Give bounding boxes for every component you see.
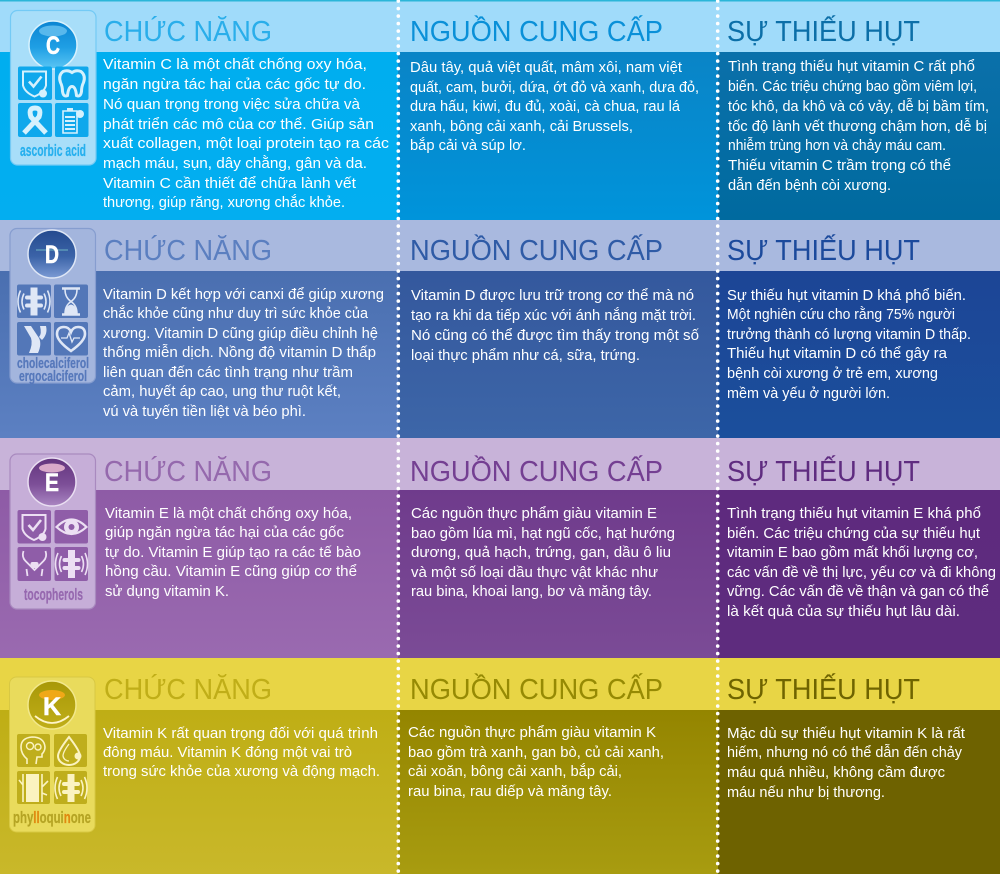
- text block: vitamin K sources: cải xoăn, bông cải xanh, bắp cải,: [408, 763, 622, 780]
- heading: sources: NGUỒN CUNG CẤP: [410, 14, 663, 48]
- text block: vitamin E function: hồng cầu. Vitamin E cũng giúp cơ thể: [105, 563, 357, 580]
- text block: vitamin D deficiency: bệnh còi xương ở trẻ em, xương: [727, 365, 938, 382]
- badge: vitamin K: [10, 677, 95, 832]
- text block: vitamin C function: mạch máu, sụn, dây chằng, gân và da.: [103, 155, 367, 172]
- text block: vitamin D sources: tạo ra khi da tiếp xúc với ánh nắng mặt trời.: [411, 307, 696, 324]
- icon: battery: [55, 103, 88, 137]
- text block: vitamin D deficiency: Thiếu hụt vitamin D có thể gây ra: [727, 345, 948, 362]
- text block: vitamin E deficiency: là kết quả của sự thiếu hụt lâu dài.: [727, 603, 960, 620]
- text block: vitamin K deficiency: [727, 725, 966, 801]
- label: phylloquinone: phylloquinone: [13, 809, 91, 827]
- text block: vitamin D sources: Nó cũng có thể được tìm thấy trong một số: [411, 327, 700, 344]
- badge: vitamin E: [10, 454, 96, 609]
- text block: vitamin E deficiency: Tình trạng thiếu hụt vitamin E khá phổ: [727, 505, 981, 522]
- text block: vitamin E function: Vitamin E là một chất chống oxy hóa,: [105, 505, 352, 522]
- text block: vitamin E sources: [411, 505, 675, 600]
- label: ascorbic acid: ascorbic acid: [20, 142, 86, 160]
- text block: vitamin C sources: bắp cải và súp lơ.: [410, 137, 526, 154]
- icon: K sphere: [28, 681, 76, 729]
- text block: vitamin K sources: rau bina, rau diếp và măng tây.: [408, 783, 612, 800]
- text block: vitamin E deficiency: vững. Các vấn đề về thận và gan có thể: [727, 583, 989, 600]
- heading: sources: NGUỒN CUNG CẤP: [410, 672, 663, 706]
- text block: vitamin D function: xương. Vitamin D cũng giúp điều chỉnh hệ: [103, 325, 378, 342]
- text block: vitamin C deficiency: nhiễm trùng hơn và chảy máu cam.: [728, 137, 946, 154]
- text block: vitamin D sources: loại thực phẩm như cá, sữa, trứng.: [411, 347, 640, 364]
- icon: joint: [54, 547, 88, 581]
- icon: hourglass: [54, 284, 88, 318]
- icon: C sphere: [29, 21, 77, 69]
- text block: vitamin D function: vú và tuyến tiền liệt và béo phì.: [103, 403, 306, 420]
- text block: vitamin C deficiency: biến. Các triệu chứng bao gồm viêm lợi,: [728, 78, 977, 95]
- panel: vitamin D row: [0, 220, 1000, 438]
- text block: vitamin D deficiency: trưởng thành có lượng vitamin D thấp.: [727, 326, 971, 343]
- text block: vitamin K function: đông máu. Vitamin K đóng một vai trò: [103, 744, 352, 761]
- text block: vitamin C sources: quất, cam, bưởi, dứa, ớt đỏ và xanh, dưa đỏ,: [410, 79, 699, 96]
- badge: vitamin D: [10, 228, 96, 385]
- dotted column divider left: [396, 1, 400, 874]
- icon: C sphere: C: [46, 32, 60, 60]
- text block: vitamin E sources: dương, quả hạch, trứng, gan, dầu ô liu: [411, 544, 671, 561]
- text block: vitamin K deficiency: Mặc dù sự thiếu hụt vitamin K là rất: [727, 725, 966, 742]
- text block: vitamin E deficiency: [727, 505, 996, 620]
- label: cholecalciferol ergocalciferol: [17, 355, 89, 385]
- heading: sources: NGUỒN CUNG CẤP: [410, 454, 663, 488]
- text block: vitamin K deficiency: máu nếu như bị thương.: [727, 784, 885, 801]
- text block: vitamin C deficiency: tóc khô, da khô và có vảy, dễ bị bầm tím,: [728, 98, 989, 115]
- text block: vitamin D function: Vitamin D kết hợp với canxi để giúp xương: [103, 286, 384, 303]
- text block: vitamin C sources: xanh, bông cải xanh, cải Brussels,: [410, 118, 633, 135]
- icon: brain: [17, 734, 50, 767]
- panel: vitamin K row: [0, 658, 1000, 874]
- text block: vitamin C function: xuất collagen, một loại protein tạo ra các: [103, 135, 390, 152]
- text block: vitamin K sources: Các nguồn thực phẩm giàu vitamin K: [408, 724, 656, 741]
- icon: shield: [18, 66, 52, 100]
- text block: vitamin C deficiency: [728, 58, 989, 194]
- text block: vitamin K deficiency: máu quá nhiều, không cầm được: [727, 764, 945, 781]
- icon: throat: [18, 547, 51, 581]
- icon: knee: [17, 322, 51, 356]
- icon: vessel: [17, 771, 50, 804]
- text block: vitamin E sources: và một số loại dầu thực vật khác như: [411, 564, 658, 581]
- text block: vitamin D deficiency: mềm và yếu ở người lớn.: [727, 385, 890, 402]
- text block: vitamin D deficiency: Một nghiên cứu cho rằng 75% người: [727, 306, 955, 323]
- text block: vitamin E sources: rau bina, khoai lang, bơ và măng tây.: [411, 583, 652, 600]
- heading: function: CHỨC NĂNG: [104, 455, 272, 488]
- text block: vitamin C function: ngăn ngừa tác hại của các gốc tự do.: [103, 76, 366, 93]
- heading: function: CHỨC NĂNG: [104, 234, 272, 267]
- icon: K sphere: K: [43, 693, 61, 721]
- icon: D sphere: [28, 230, 76, 278]
- heading: function: CHỨC NĂNG: [104, 673, 272, 706]
- heading: deficiency: SỰ THIẾU HỤT: [727, 233, 920, 267]
- text block: vitamin D sources: [411, 287, 700, 364]
- text block: vitamin K sources: [408, 724, 664, 800]
- text block: vitamin D function: [103, 286, 384, 420]
- text block: vitamin C sources: [410, 59, 699, 154]
- text block: vitamin E function: tự do. Vitamin E giúp tạo ra các tế bào: [105, 544, 361, 561]
- label: cholecalciferol ergocalciferol: cholecalciferol: [17, 355, 89, 372]
- icon: eye: [54, 510, 88, 544]
- icon: E sphere: [28, 458, 76, 506]
- text block: vitamin E function: giúp ngăn ngừa tác hại của các gốc: [105, 524, 344, 541]
- dotted column divider right: [716, 1, 720, 874]
- text block: vitamin E sources: bao gồm lúa mì, hạt ngũ cốc, hạt hướng: [411, 525, 675, 542]
- icon: shield: [18, 510, 51, 544]
- panel: vitamin E row: [0, 438, 1000, 658]
- text block: vitamin C function: Vitamin C cần thiết để chữa lành vết: [103, 175, 357, 192]
- text block: vitamin K sources: bao gồm trà xanh, gan bò, củ cải xanh,: [408, 744, 664, 761]
- heading: deficiency: SỰ THIẾU HỤT: [727, 672, 920, 706]
- text block: vitamin D function: thống miễn dịch. Nồng độ vitamin D thấp: [103, 344, 376, 361]
- text block: vitamin E function: [105, 505, 361, 600]
- text block: vitamin E deficiency: biến. Các triệu chứng của sự thiếu hụt: [727, 525, 981, 542]
- heading: sources: NGUỒN CUNG CẤP: [410, 233, 663, 267]
- icon: E sphere: E: [45, 469, 59, 497]
- text block: vitamin K function: trong sức khỏe của xương và động mạch.: [103, 763, 380, 780]
- heading: function: CHỨC NĂNG: [104, 15, 272, 48]
- heading: deficiency: SỰ THIẾU HỤT: [727, 14, 920, 48]
- icon: joint: [54, 771, 87, 804]
- text block: vitamin D function: cảm, huyết áp cao, ung thư ruột kết,: [103, 383, 341, 400]
- text block: vitamin C function: [103, 56, 390, 211]
- text block: vitamin D deficiency: [727, 287, 971, 402]
- badge: vitamin C: [10, 10, 96, 165]
- text block: vitamin K deficiency: hiếm, nhưng nó có thể dẫn đến chảy: [727, 744, 962, 761]
- text block: vitamin C deficiency: tốc độ lành vết thương chậm hơn, dễ bị: [728, 118, 987, 135]
- text block: vitamin C sources: Dâu tây, quả việt quất, mâm xôi, nam việt: [410, 59, 683, 76]
- text block: vitamin K function: [103, 725, 380, 780]
- text block: vitamin D function: chắc khỏe cũng như duy trì sức khỏe của: [103, 305, 369, 322]
- icon: drop: [54, 734, 87, 767]
- text block: vitamin D function: liên quan đến các tình trạng như trầm: [103, 364, 353, 381]
- text block: vitamin C deficiency: Thiếu vitamin C trầm trọng có thể: [728, 157, 951, 174]
- text block: vitamin C function: phát triển các mô của cơ thể. Giúp sản: [103, 116, 374, 133]
- text block: vitamin D sources: Vitamin D được lưu trữ trong cơ thể mà nó: [411, 287, 694, 304]
- icon: tooth: [55, 66, 88, 100]
- label: tocopherols: tocopherols: [24, 586, 83, 604]
- text block: vitamin C function: Vitamin C là một chất chống oxy hóa,: [103, 56, 367, 73]
- text block: vitamin C function: thương, giúp răng, xương chắc khỏe.: [103, 194, 345, 211]
- text block: vitamin K function: Vitamin K rất quan trọng đối với quá trình: [103, 725, 378, 742]
- text block: vitamin C sources: dưa hấu, kiwi, đu đủ, xoài, cà chua, rau lá: [410, 98, 681, 115]
- heading: deficiency: SỰ THIẾU HỤT: [727, 454, 920, 488]
- label: cholecalciferol ergocalciferol: ergocalciferol: [19, 368, 87, 385]
- text block: vitamin C deficiency: dẫn đến bệnh còi xương.: [728, 177, 891, 194]
- icon: ribbon: [18, 103, 52, 137]
- text block: vitamin E function: sử dụng vitamin K.: [105, 583, 229, 600]
- icon: joint: [17, 284, 51, 318]
- icon: D sphere: D: [45, 241, 59, 269]
- text block: vitamin E deficiency: vitamin E bao gồm mất khối lượng cơ,: [727, 544, 978, 561]
- text block: vitamin C function: Nó quan trọng trong việc sửa chữa và: [103, 96, 361, 113]
- icon: heart pulse: [54, 322, 88, 356]
- text block: vitamin C deficiency: Tình trạng thiếu hụt vitamin C rất phổ: [728, 58, 975, 75]
- text block: vitamin E sources: Các nguồn thực phẩm giàu vitamin E: [411, 505, 657, 522]
- text block: vitamin E deficiency: các vấn đề về thị lực, yếu cơ và đi không: [727, 564, 996, 581]
- panel: vitamin C row: [0, 0, 1000, 220]
- text block: vitamin D deficiency: Sự thiếu hụt vitamin D khá phổ biến.: [727, 287, 966, 304]
